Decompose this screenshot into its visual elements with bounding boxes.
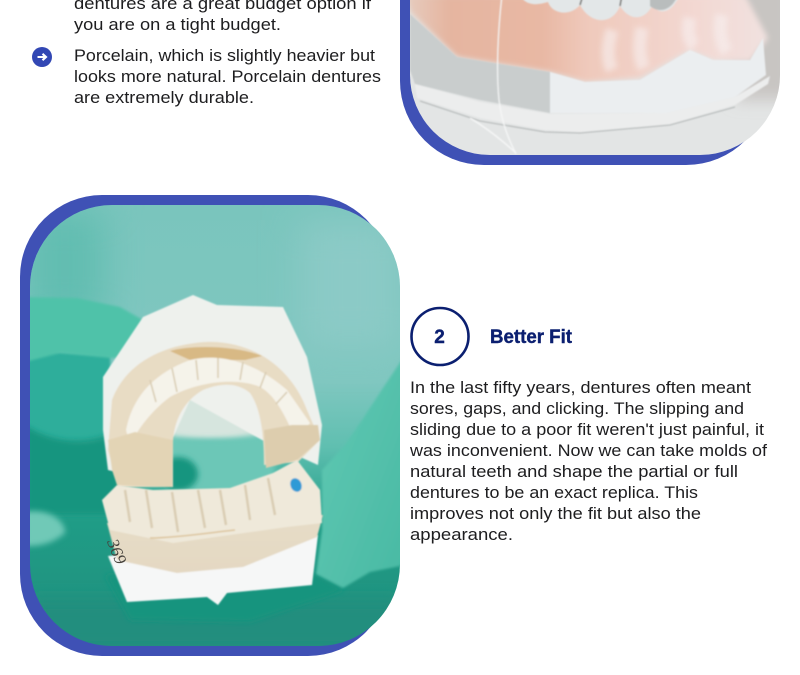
text block: porcelain list item: are extremely durable. xyxy=(74,88,254,107)
text block: better fit description: sliding due to a poor fit weren't just painful, it xyxy=(410,420,764,439)
text block: porcelain list item: looks more natural. Porcelain dentures xyxy=(74,67,381,86)
text block: first list item xyxy=(74,0,371,34)
photo: denture model close-up xyxy=(405,0,795,160)
teeth band xyxy=(102,460,322,543)
text block: better fit description: natural teeth and shape the partial or full xyxy=(410,462,738,481)
text block: better fit description: improves not only the fit but also the xyxy=(410,504,701,523)
base lip xyxy=(415,76,770,132)
left glove hand xyxy=(30,352,112,443)
hole behind the arch xyxy=(173,400,257,442)
icon: numbered circle 2 xyxy=(412,308,468,365)
blue backing shape, top right photo xyxy=(400,0,770,165)
text block: porcelain list item: Porcelain, which is slightly heavier but xyxy=(74,46,375,65)
text block: better fit description: sores, gaps, and clicking. The slipping and xyxy=(410,399,744,418)
text block: better fit description: In the last fifty years, dentures often meant xyxy=(410,378,751,397)
blue backing shape, lower left photo xyxy=(20,195,390,656)
text block: better fit description: appearance. xyxy=(410,525,513,544)
green cloth under cast xyxy=(105,570,345,622)
white base xyxy=(108,535,318,605)
lower cast xyxy=(102,460,323,605)
upper cast xyxy=(103,295,322,487)
right glove xyxy=(316,355,405,588)
tan band xyxy=(107,515,323,573)
text block: better fit description: was inconvenient. Now we can take molds of xyxy=(409,441,767,460)
teeth xyxy=(470,0,680,154)
gum tooth ridges xyxy=(608,15,727,70)
text block: first list item: you are on a tight budget. xyxy=(74,15,281,34)
text block: better fit description: dentures to be an exact replica. This xyxy=(410,483,698,502)
heading: Better Fit: Better Fit xyxy=(490,327,573,348)
handwritten cast number: 369 xyxy=(103,535,130,567)
gray left base xyxy=(410,14,550,113)
photo panel: plaster dental cast held in green gloves on blue backing xyxy=(20,195,405,656)
photo panel: denture model with floss on blue backing xyxy=(400,0,795,165)
thumb xyxy=(25,297,148,362)
floss xyxy=(498,0,516,154)
icon: blue circle arrow bullet xyxy=(32,47,52,67)
photo: plaster dental cast xyxy=(25,205,405,650)
text block: porcelain list item xyxy=(74,46,381,107)
text block: better fit description xyxy=(409,378,767,544)
icon: numbered circle 2: 2 xyxy=(434,327,445,348)
gums xyxy=(405,0,768,82)
white right base xyxy=(550,38,766,113)
